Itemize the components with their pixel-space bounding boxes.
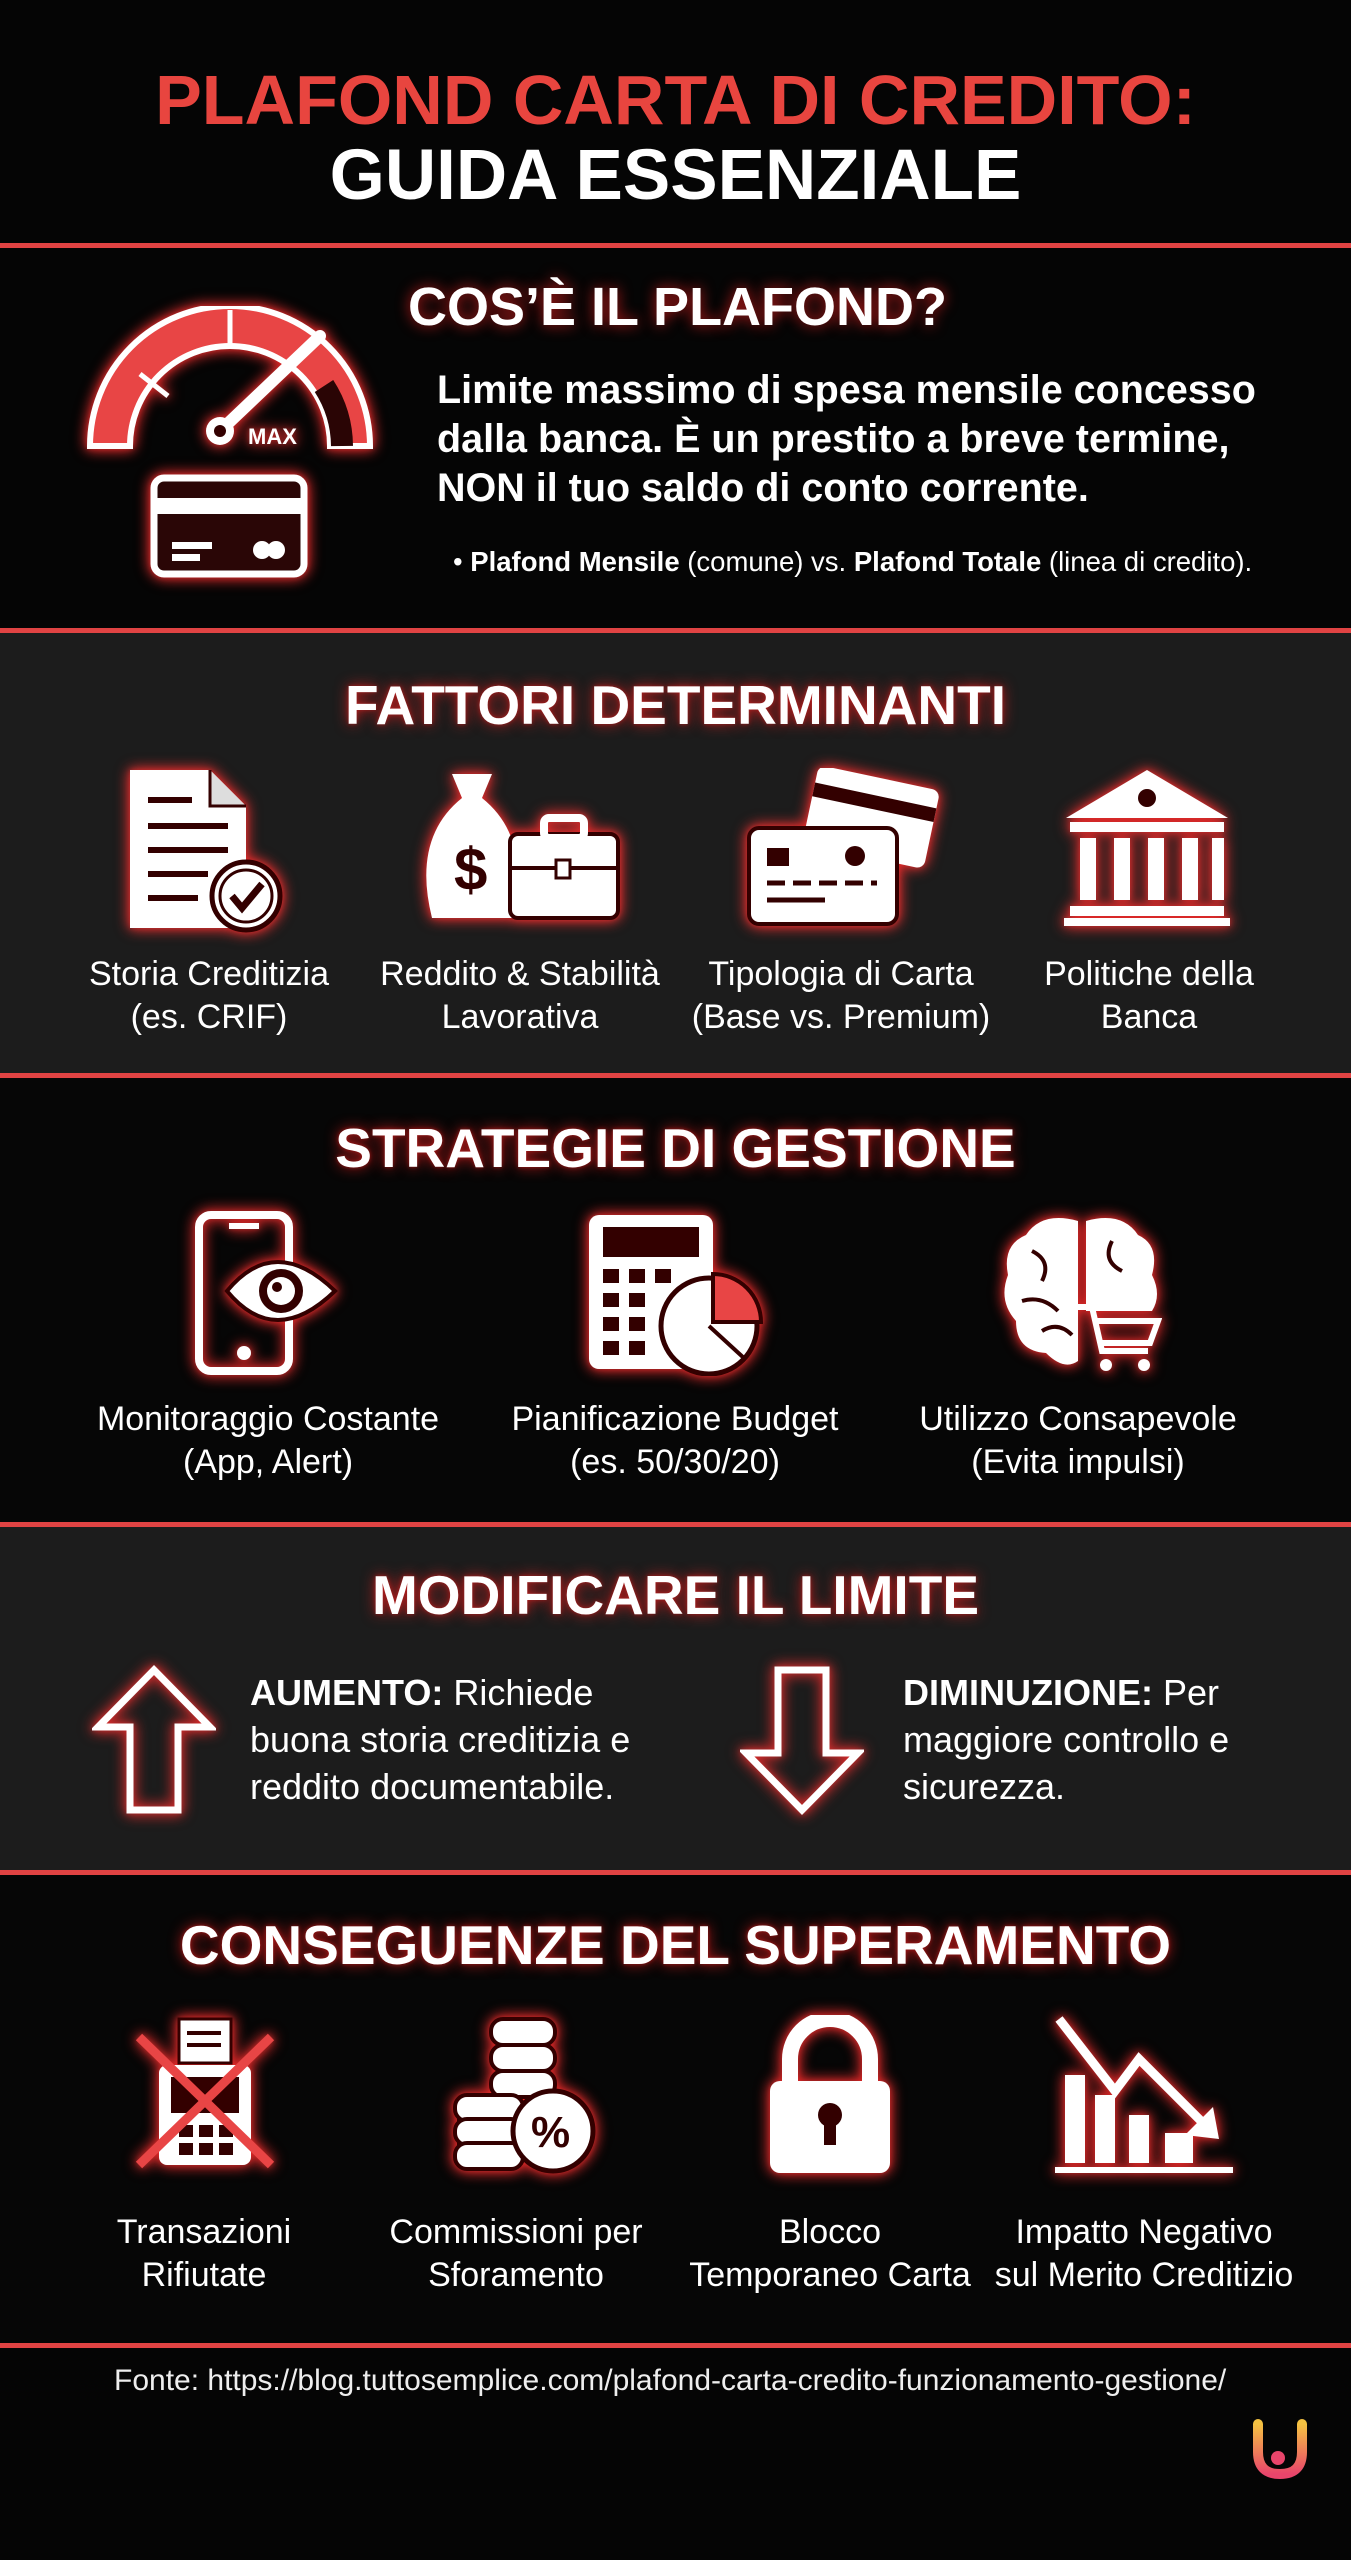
title: GUIDA ESSENZIALE: [330, 136, 1021, 215]
label: utilizzo: Utilizzo Consapevole: [919, 1400, 1237, 1438]
text block: definition: dalla banca. È un prestito a breve termine,: [437, 417, 1229, 461]
label: blocco: [689, 2213, 971, 2294]
label: storia: (es. CRIF): [131, 998, 287, 1036]
logo: [1253, 2419, 1307, 2479]
label: utilizzo: [919, 1400, 1237, 1481]
label: impatto: [995, 2213, 1293, 2294]
text: aumento: buona storia creditizia e: [250, 1719, 630, 1760]
label: reddito: Lavorativa: [442, 998, 598, 1036]
icon: arrow up: [84, 1656, 224, 1826]
label: politiche: [1044, 955, 1254, 1036]
text: aumento: [250, 1672, 630, 1807]
text: diminuzione: DIMINUZIONE: Per: [903, 1672, 1219, 1713]
icon: declining chart: [1046, 2008, 1242, 2186]
heading: cos'è: COS’È IL PLAFOND?: [408, 277, 947, 337]
icon: padlock: [758, 2002, 902, 2186]
text block: definition: [437, 368, 1256, 510]
panel: conseguenze: [0, 1875, 1351, 2344]
icon: money bag and briefcase: [414, 762, 632, 932]
label: pianificazione: (es. 50/30/20): [570, 1443, 780, 1481]
panel: strategie di gestione: [0, 1078, 1351, 1522]
label: commissioni: Sforamento: [428, 2256, 604, 2294]
icon: brain cart: [992, 1206, 1172, 1381]
label: impatto: sul Merito Creditizio: [995, 2256, 1293, 2294]
heading: conseguenze: CONSEGUENZE DEL SUPERAMENTO: [180, 1914, 1171, 1976]
text: aumento: AUMENTO: Richiede: [250, 1672, 593, 1713]
icon: gauge: [75, 294, 385, 462]
icon: cards: [734, 756, 950, 938]
text block: definition: Limite massimo di spesa mensile concesso: [437, 368, 1256, 412]
label: impatto: Impatto Negativo: [1015, 2213, 1273, 2251]
icon: money bag and briefcase: $: [454, 836, 487, 903]
label: commissioni: [389, 2213, 643, 2294]
label: commissioni: Commissioni per: [389, 2213, 643, 2251]
text: diminuzione: maggiore controllo e: [903, 1719, 1229, 1760]
label: politiche: Banca: [1101, 998, 1197, 1036]
label: monitoraggio: [97, 1400, 439, 1481]
label: reddito: Reddito & Stabilità: [380, 955, 660, 993]
icon: calculator pie: [576, 1202, 774, 1388]
text block: definition: NON il tuo saldo di conto corrente.: [437, 466, 1089, 510]
heading: fattori: FATTORI DETERMINANTI: [345, 674, 1006, 736]
icon: rejected transaction: [127, 2005, 283, 2178]
title: [155, 61, 1196, 215]
icon: gauge: MAX: [248, 424, 297, 449]
label: blocco: Blocco: [779, 2213, 881, 2251]
icon: phone eye: [182, 1198, 346, 1388]
title: PLAFOND CARTA DI CREDITO:: [155, 61, 1196, 139]
icon: coins percent: %: [531, 2108, 570, 2157]
label: blocco: Temporaneo Carta: [689, 2256, 971, 2294]
label: storia: Storia Creditizia: [89, 955, 329, 993]
label: transazioni: [117, 2213, 291, 2294]
text: aumento: reddito documentabile.: [250, 1766, 614, 1807]
panel: fattori determinanti: [0, 633, 1351, 1073]
icon: coins percent: [441, 2004, 608, 2186]
heading: modificare: MODIFICARE IL LIMITE: [372, 1564, 979, 1626]
text: diminuzione: sicurezza.: [903, 1766, 1065, 1807]
label: tipologia: Tipologia di Carta: [708, 955, 974, 993]
label: reddito: [380, 955, 660, 1036]
label: pianificazione: Pianificazione Budget: [511, 1400, 838, 1438]
source text: Fonte: https://blog.tuttosemplice.com/plafond-carta-credito-funzionamento-gestione/: [114, 2364, 1226, 2397]
heading: strategie: STRATEGIE DI GESTIONE: [335, 1117, 1016, 1179]
panel: modificare il limite: [0, 1527, 1351, 1870]
icon: arrow down: [732, 1654, 872, 1824]
label: monitoraggio: Monitoraggio Costante: [97, 1400, 439, 1438]
text: diminuzione: [903, 1672, 1229, 1807]
label: monitoraggio: (App, Alert): [183, 1443, 353, 1481]
label: pianificazione: [511, 1400, 838, 1481]
label: utilizzo: (Evita impulsi): [971, 1443, 1185, 1481]
bullet: • Plafond Mensile (comune) vs. Plafond Totale (linea di credito).: [453, 546, 1252, 577]
label: transazioni: Transazioni: [117, 2213, 291, 2251]
label: transazioni: Rifiutate: [142, 2256, 266, 2294]
label: politiche: Politiche della: [1044, 955, 1254, 993]
label: tipologia: (Base vs. Premium): [692, 998, 990, 1036]
label: storia: [89, 955, 330, 1036]
icon: document check: [118, 758, 294, 944]
icon: credit card: [138, 462, 320, 590]
icon: bank: [1054, 760, 1240, 938]
panel: cos'è il plafond: [0, 248, 1351, 628]
label: tipologia: [692, 955, 990, 1036]
